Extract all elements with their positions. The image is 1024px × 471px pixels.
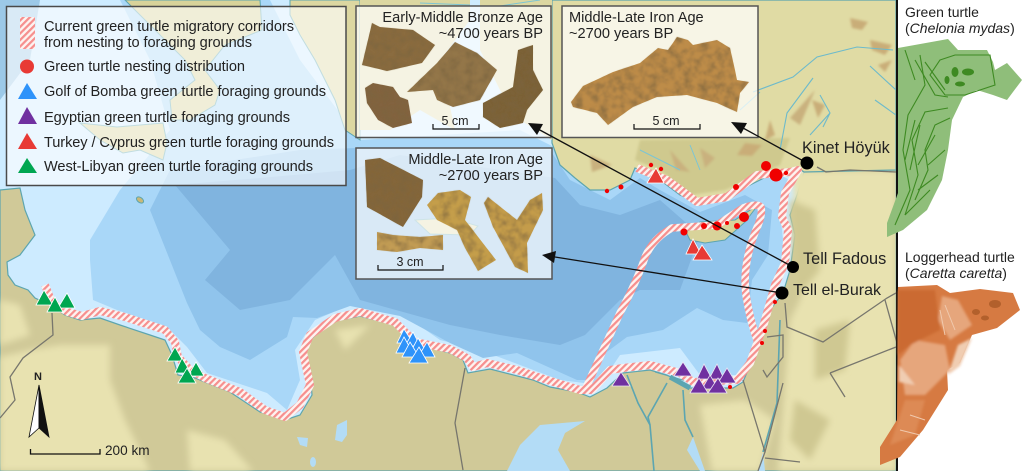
icon: loggerhead turtle	[880, 285, 1020, 465]
heading: Middle-Late Iron Age: Middle-Late Iron Age	[408, 152, 543, 168]
site: Tell el-Burak: Tell el-Burak	[793, 282, 882, 299]
north arrow	[29, 371, 49, 437]
inset: Middle-Late Iron Age bone, Kinet Höyük	[562, 6, 758, 138]
heading: Green turtle	[905, 4, 1015, 36]
legend marker: West-Libyan	[18, 158, 37, 173]
foraging grounds: Turkey and Cyprus	[647, 168, 712, 260]
legend	[6, 6, 346, 186]
site: Kinet Höyük: Kinet Höyük	[802, 139, 891, 157]
lakes	[297, 420, 765, 471]
legend marker: nesting	[20, 60, 34, 74]
heading: Green turtle: Green turtle	[905, 4, 979, 20]
legend text: Egyptian: Egyptian green turtle foraging grounds	[44, 110, 290, 126]
arrow: Kinet Höyük to inset	[731, 122, 807, 163]
legend text: nesting: Green turtle nesting distribution	[44, 59, 245, 75]
land: Balkans	[290, 0, 360, 140]
heading: Early-Middle Bronze Age: Early-Middle Bronze Age	[382, 10, 543, 26]
scale bar: 3 cm: 3 cm	[396, 255, 424, 269]
legend marker: Bomba	[18, 83, 37, 99]
land: Cyprus	[686, 209, 756, 244]
heading: Middle-Late Iron Age: Middle-Late Iron Age	[569, 10, 704, 26]
heading: Green turtle: (Chelonia mydas)	[905, 20, 1015, 36]
site: Tell Fadous	[787, 250, 886, 273]
inset: Middle-Late Iron Age bones, Tell el-Burak	[356, 148, 552, 279]
foraging grounds: West-Libyan	[36, 290, 204, 383]
subheading: 4700 years: ~4700 years BP	[439, 26, 543, 42]
legend marker: Turkey/Cyprus	[18, 133, 37, 149]
corridors: Cyprus branch	[585, 205, 761, 390]
site: Tell Fadous: Tell Fadous	[803, 250, 886, 268]
subheading: 2700 years: ~2700 years BP	[439, 168, 543, 184]
corridors: main coastal migratory route	[45, 168, 798, 417]
legend marker: Egyptian	[18, 107, 37, 124]
arrow: Tell el-Burak to inset	[542, 251, 782, 293]
scale bar: 5 cm: 5 cm	[652, 114, 680, 128]
scale bar: 3 cm	[378, 255, 443, 270]
land: Italy and Sicily	[80, 0, 262, 160]
legend swatch: corridor	[20, 17, 35, 49]
bone	[571, 37, 749, 125]
heading: Loggerhead turtle	[905, 249, 1015, 281]
arrow: Tell Fadous to inset	[528, 123, 793, 267]
legend text: West-Libyan: West-Libyan green turtle foraging grounds	[44, 159, 313, 175]
scale bar: 200 km: 200 km	[105, 443, 150, 458]
sea: upper-left shelf	[0, 0, 40, 100]
land: Turkey relief	[590, 18, 892, 195]
sea: mid depth	[150, 148, 772, 380]
legend text: Bomba: Golf of Bomba green turtle foraging grounds	[44, 84, 326, 100]
icon: green turtle	[887, 39, 1022, 237]
scale bar: 5 cm: 5 cm	[441, 114, 469, 128]
bones	[362, 23, 543, 128]
scale bar: 200 km	[30, 445, 149, 455]
map right border	[896, 0, 898, 471]
sea: deep	[175, 155, 700, 345]
land: Crete	[415, 218, 478, 235]
nesting sites	[605, 161, 788, 389]
inset: Early-Middle Bronze Age bones	[356, 6, 551, 138]
rivers and coast features	[420, 0, 896, 471]
legend text: corridor: Current green turtle migratory corridors	[44, 19, 294, 35]
heading: Loggerhead turtle: Loggerhead turtle	[905, 249, 1015, 265]
country borders	[0, 167, 897, 471]
foraging grounds: Gulf of Bomba	[396, 329, 435, 363]
land: Malta	[136, 196, 144, 204]
sea: shelf	[90, 0, 788, 410]
land: north Africa	[0, 165, 896, 471]
land: Turkey	[552, 0, 896, 203]
heading: Loggerhead turtle: (Caretta caretta)	[905, 265, 1007, 281]
sea: shallow	[0, 0, 803, 418]
foraging grounds: Egyptian	[612, 362, 736, 393]
legend text: Turkey/Cyprus: Turkey / Cyprus green turtle foraging grounds	[44, 135, 334, 151]
bones	[365, 158, 543, 273]
north arrow: N	[34, 371, 42, 383]
site: Kinet Höyük	[800, 139, 891, 170]
subheading: 2700 years: ~2700 years BP	[569, 26, 673, 42]
legend text: corridor line 2: from nesting to foraging grounds	[44, 35, 252, 51]
scale bar: 5 cm	[433, 114, 479, 129]
scale bar: 5 cm	[634, 114, 700, 129]
land: desert relief	[0, 170, 896, 471]
